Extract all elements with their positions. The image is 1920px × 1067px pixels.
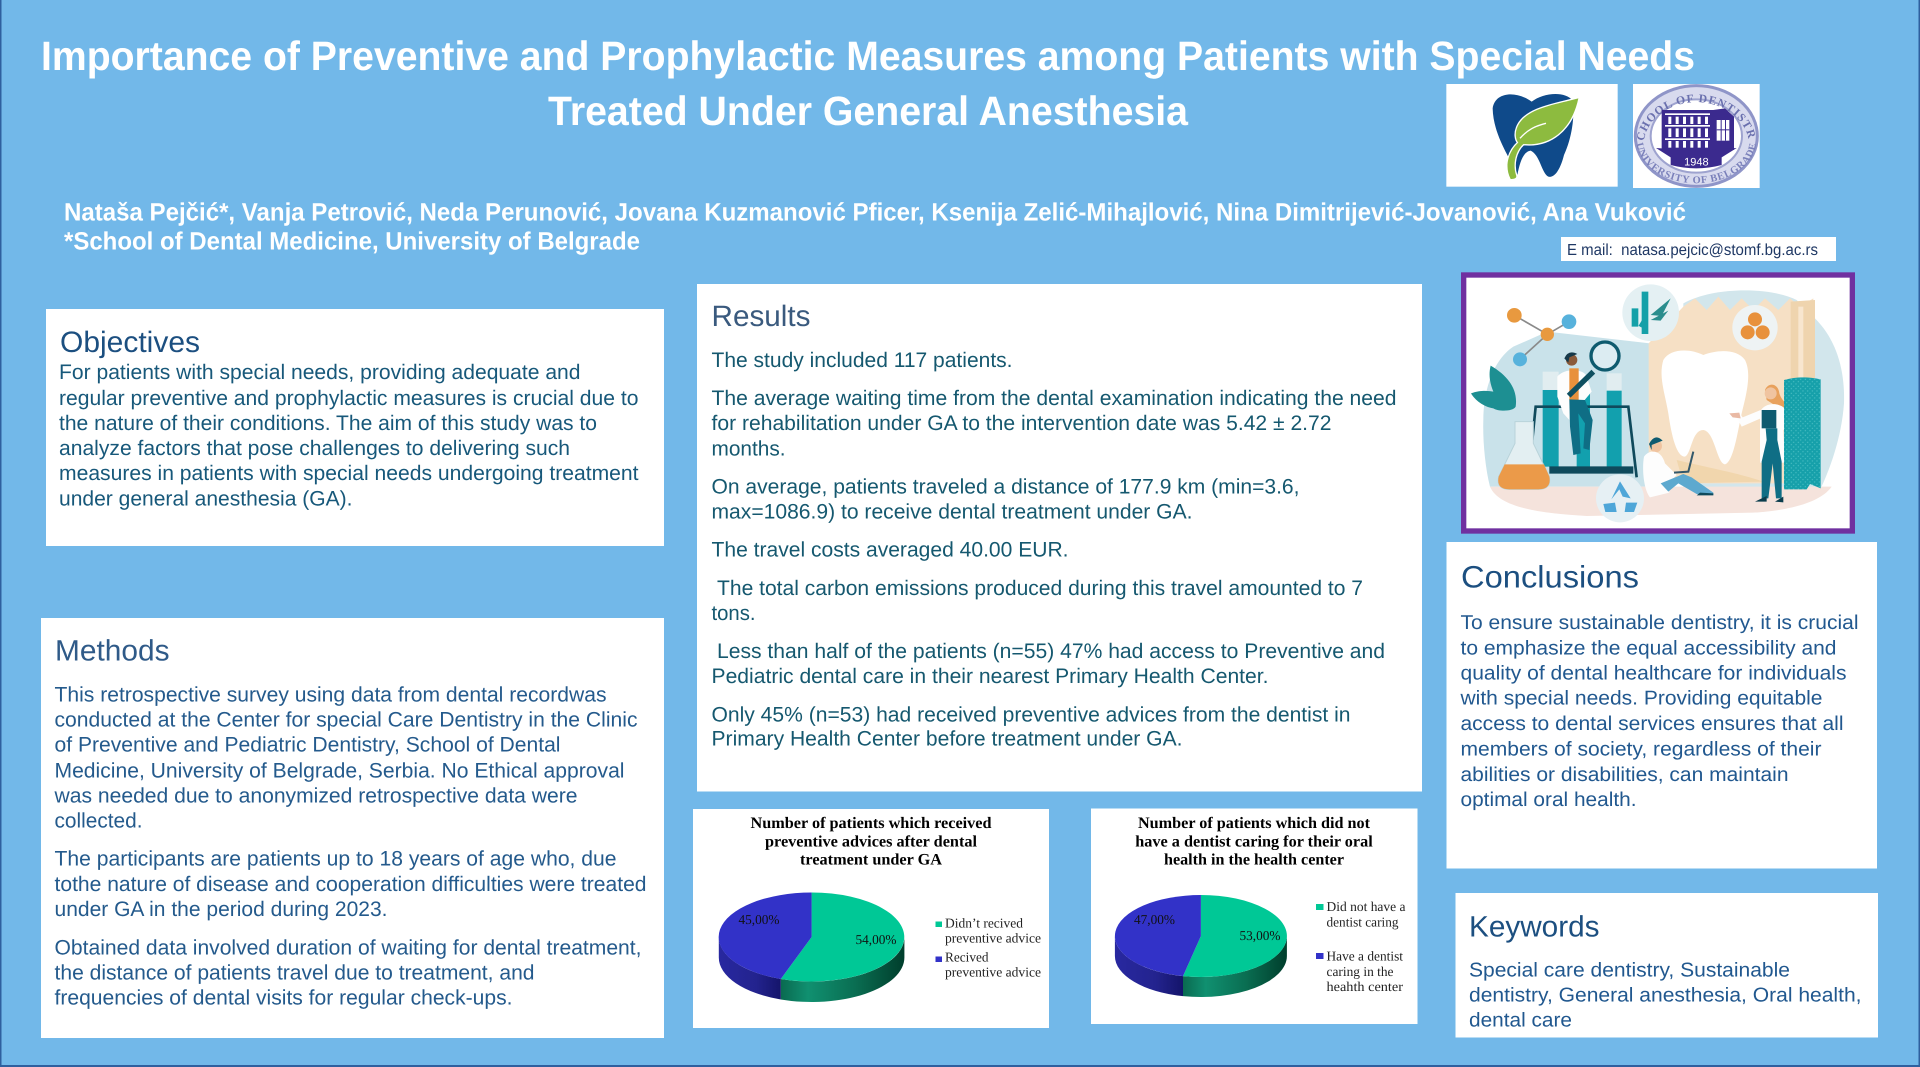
recycling badge [1596, 474, 1644, 522]
test tubes and rack [1532, 372, 1637, 477]
logo: school of dentistry seal: SCHOOL OF DENTISTRY [1637, 94, 1755, 140]
logo: school of dentistry seal: 1948 [1684, 156, 1709, 168]
chart legend: preventive advice [945, 964, 1041, 980]
white tooth [1662, 350, 1748, 464]
methods text: the distance of patients travel due to treatment, and [54, 962, 534, 984]
conclusions text: to emphasize the equal accessibility and [1460, 638, 1836, 660]
conclusions text: optimal oral health. [1460, 789, 1636, 811]
heading: methods: Methods [55, 634, 170, 668]
chart title [750, 815, 992, 868]
molecule [1507, 308, 1576, 366]
heading: results: Results [712, 300, 810, 333]
chart title: health in the health center [1164, 852, 1344, 868]
chart legend [936, 916, 1041, 980]
logo: school of dentistry seal: UNIVERSITY OF BELGRADE [1637, 142, 1756, 184]
heading: conclusions: Conclusions [1461, 560, 1639, 594]
chart title: treatment under GA [800, 852, 942, 868]
conclusions text: quality of dental healthcare for individuals [1460, 662, 1846, 684]
results text: The total carbon emissions produced during this travel amounted to 7 [717, 577, 1363, 600]
title: Importance of Preventive and Prophylactic Measures among Patients with Special Needs [41, 33, 1695, 79]
methods text: frequencies of dental visits for regular check-ups. [54, 986, 512, 1010]
authors and affiliation: Nataša Pejčić*, Vanja Petrović, Neda Perunović, Jovana Kuzmanović Pficer, Ksenija Zelić-Mihajlović, Nina Dimitrijević-Jovanović, Ana Vuković [64, 198, 1686, 226]
conclusions text: abilities or disabilities, can maintain [1460, 764, 1788, 786]
panel: results [697, 284, 1422, 792]
pie slices: 45,00% [738, 912, 780, 927]
results text: Primary Health Center before treatment under GA. [712, 728, 1182, 750]
methods text: This retrospective survey using data from dental recordwas [54, 684, 606, 706]
results text: months. [712, 438, 786, 460]
objectives text: analyze factors that pose challenges to delivering such [59, 437, 570, 460]
results text: On average, patients traveled a distance of 177.9 km (min=3.6, [712, 476, 1300, 498]
chart legend: preventive advice [945, 930, 1041, 946]
email box: E mail: natasa.pejcic@stomf.bg.ac.rs [1567, 242, 1818, 259]
results text: Pediatric dental care in their nearest Primary Health Center. [712, 665, 1268, 688]
chart legend: caring in the [1326, 964, 1394, 979]
methods text: The participants are patients up to 18 years of age who, due [54, 848, 617, 870]
title [41, 33, 1695, 134]
objectives text: measures in patients with special needs undergoing treatment [59, 462, 639, 485]
panel: methods [41, 618, 664, 1038]
results text: for rehabilitation under GA to the intervention date was 5.42 ± 2.72 [712, 412, 1332, 435]
methods text: tothe nature of disease and cooperation difficulties were treated [54, 873, 646, 896]
pie slices: 47,00% [1134, 912, 1175, 927]
teal roll [1784, 377, 1821, 489]
scientist with magnifier [1557, 342, 1619, 455]
chart title: Number of patients which did not [1138, 815, 1371, 832]
heading: keywords: Keywords [1469, 910, 1600, 944]
authors and affiliation: *School of Dental Medicine, University of Belgrade [64, 228, 640, 256]
objectives text: For patients with special needs, providing adequate and [59, 361, 580, 384]
conclusions text: with special needs. Providing equitable [1459, 688, 1822, 710]
conclusions text: members of society, regardless of their [1460, 738, 1822, 760]
logo: tooth with leaf [1446, 84, 1618, 187]
heading: objectives: Objectives [60, 326, 200, 359]
pie slices: 53,00% [1240, 928, 1280, 943]
chart legend: Did not have a [1326, 899, 1406, 914]
panel: keywords [1456, 893, 1878, 1038]
keywords text: dental care [1469, 1010, 1572, 1032]
chart title [1135, 815, 1373, 868]
green leaves [1471, 366, 1516, 411]
chart: preventive advices pie [693, 809, 1049, 1028]
results text: max=1086.9) to receive dental treatment under GA. [712, 500, 1192, 524]
methods text: Medicine, University of Belgrade, Serbia. No Ethical approval [54, 760, 624, 782]
chart legend [1316, 899, 1406, 994]
seated person with laptop [1643, 437, 1713, 497]
chart: dentist caring pie [1091, 808, 1418, 1024]
conclusions text: To ensure sustainable dentistry, it is crucial [1460, 612, 1858, 634]
methods text: was needed due to anonymized retrospective data were [53, 784, 578, 808]
objectives text: regular preventive and prophylactic measures is crucial due to [59, 387, 638, 410]
honeycomb badge [1732, 305, 1778, 350]
results text [712, 349, 1396, 750]
methods text: of Preventive and Pediatric Dentistry, School of Dental [54, 734, 560, 756]
chart title: preventive advices after dental [765, 834, 978, 850]
objectives text: under general anesthesia (GA). [59, 488, 352, 510]
objectives text [59, 361, 639, 510]
panel: conclusions [1446, 542, 1877, 868]
doctor with clipboard [1729, 385, 1790, 502]
methods text: collected. [54, 810, 142, 832]
pie slices [1115, 895, 1287, 997]
chart legend: Have a dentist [1326, 948, 1403, 964]
authors and affiliation [64, 198, 1686, 256]
results text: The average waiting time from the dental examination indicating the need [712, 387, 1396, 410]
chart title: have a dentist caring for their oral [1135, 834, 1373, 850]
bamboo badge [1622, 284, 1679, 341]
results text: Only 45% (n=53) had received preventive advices from the dentist in [712, 704, 1350, 726]
methods text: under GA in the period during 2023. [54, 898, 387, 921]
pie slices: 54,00% [856, 932, 896, 947]
panel: objectives [46, 309, 664, 546]
keywords text: Special care dentistry, Sustainable [1469, 960, 1790, 982]
keywords text [1469, 960, 1862, 1032]
methods text: Obtained data involved duration of waiting for dental treatment, [54, 936, 642, 960]
flask [1498, 422, 1550, 489]
title: Treated Under General Anesthesia [548, 88, 1189, 134]
results text: Less than half of the patients (n=55) 47% had access to Preventive and [717, 640, 1385, 663]
email box [1561, 237, 1836, 261]
logo: school of dentistry seal [1633, 84, 1760, 188]
methods text [53, 684, 646, 1010]
methods text: conducted at the Center for special Care Dentistry in the Clinic [54, 708, 638, 732]
objectives text: the nature of their conditions. The aim of this study was to [59, 412, 597, 435]
keywords text: dentistry, General anesthesia, Oral health, [1469, 984, 1862, 1006]
chart title: Number of patients which received [750, 815, 992, 832]
chart legend: Recived [945, 950, 989, 964]
chart legend: dentist caring [1326, 914, 1399, 930]
backdrop shapes [1483, 290, 1844, 516]
results text: The study included 117 patients. [712, 349, 1012, 372]
chart legend: heahth center [1326, 979, 1404, 994]
chart legend: Didn’t recived [945, 916, 1023, 930]
results text: tons. [712, 602, 756, 625]
results text: The travel costs averaged 40.00 EUR. [712, 538, 1068, 562]
pie slices [719, 892, 904, 1002]
conclusions text: access to dental services ensures that all [1460, 713, 1844, 735]
illustration: sustainable dentistry scene [1464, 275, 1852, 531]
conclusions text [1459, 612, 1858, 811]
